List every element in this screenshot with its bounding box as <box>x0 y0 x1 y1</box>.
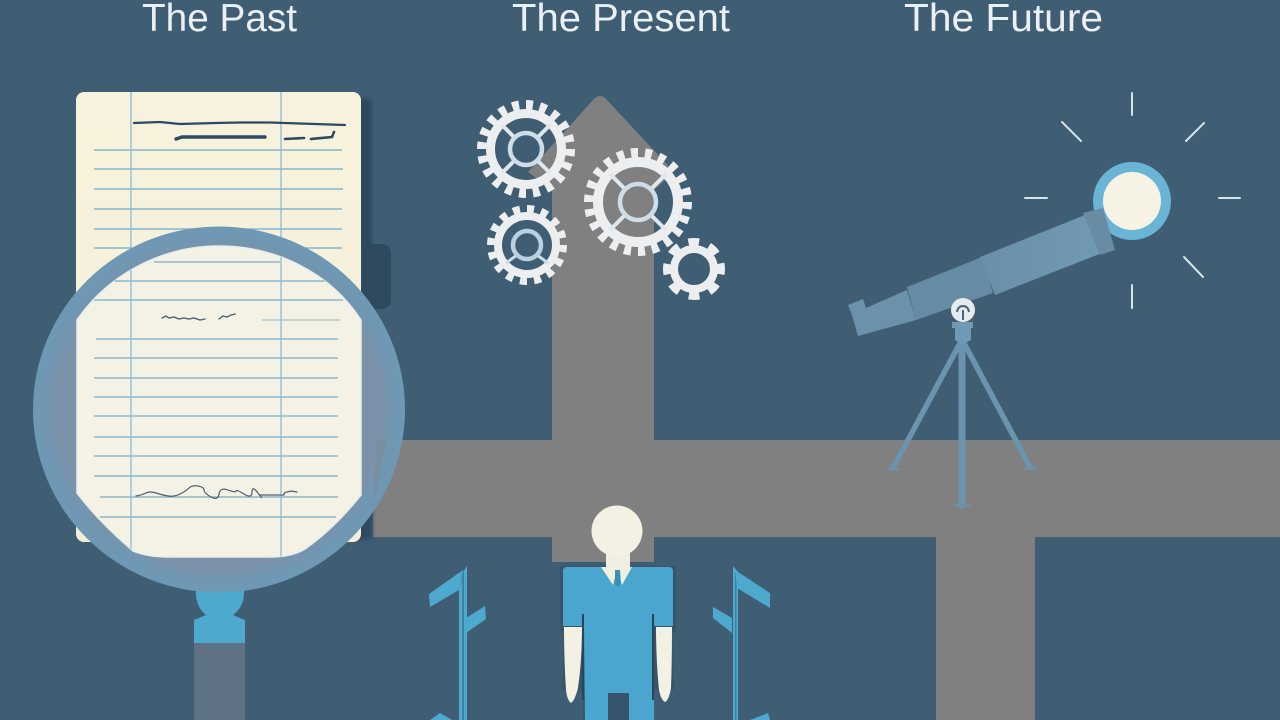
magnifier ring <box>33 226 405 592</box>
icon: right signpost <box>713 566 770 720</box>
left upper flag <box>429 570 463 607</box>
lower right road <box>936 537 1035 720</box>
gear small right <box>667 242 721 296</box>
notebook ruled lines <box>94 92 343 250</box>
magnified scribbles <box>136 314 297 498</box>
telescope eyepiece <box>848 290 916 336</box>
magnified page <box>77 246 361 557</box>
notebook page <box>76 92 361 542</box>
person right hand <box>656 627 672 702</box>
icon: magnifying glass <box>33 226 405 720</box>
horizontal road <box>373 440 1280 537</box>
left post <box>459 566 467 720</box>
gear top right <box>589 153 687 251</box>
person neck <box>606 553 630 571</box>
telescope middle tube <box>907 257 993 320</box>
vertical arrow road <box>528 96 674 562</box>
person left hand <box>564 627 582 703</box>
tripod legs <box>890 342 1034 505</box>
starburst rays <box>1025 93 1240 308</box>
person body <box>563 567 673 720</box>
icon: person <box>560 506 676 720</box>
person head <box>592 506 642 556</box>
person tie <box>615 570 621 587</box>
icon: notebook <box>76 92 391 542</box>
right bottom flag <box>750 713 770 720</box>
gear top left <box>482 105 570 193</box>
person shadow <box>560 566 676 720</box>
road seen through ring <box>374 440 386 508</box>
person collar <box>601 567 632 585</box>
right lower flag <box>713 607 732 633</box>
tripod mount <box>952 322 973 344</box>
notebook shadow <box>355 98 372 540</box>
person slit shadows <box>583 614 653 700</box>
magnifier collar <box>194 590 245 643</box>
telescope collar <box>1083 208 1115 255</box>
right post <box>733 566 738 720</box>
notebook tab <box>350 244 391 309</box>
right upper flag <box>735 570 770 608</box>
icon: gears <box>482 105 721 296</box>
tripod head <box>951 298 975 322</box>
road: gray path network with arrow <box>373 96 1280 720</box>
left bottom flag <box>430 713 452 720</box>
magnified ruled lines <box>94 240 343 560</box>
telescope lens <box>1093 162 1171 240</box>
icon: telescope <box>848 93 1240 505</box>
telescope main tube <box>980 215 1102 295</box>
gear lower left <box>492 210 562 280</box>
handwriting scribbles <box>134 122 345 139</box>
magnifier handle <box>194 640 245 720</box>
left lower flag <box>466 606 486 633</box>
icon: left signpost <box>429 566 486 720</box>
